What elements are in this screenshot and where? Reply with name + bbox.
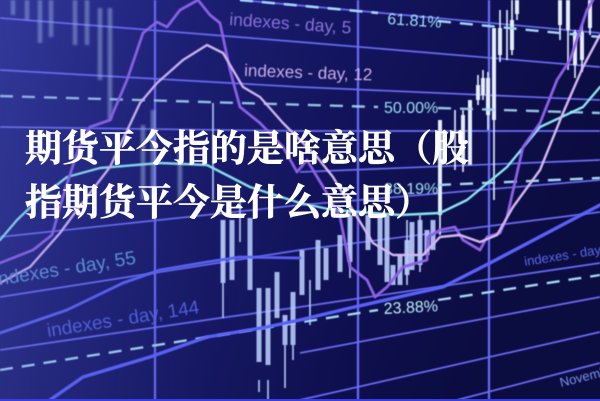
label: day 144: indexes - day, 144: [45, 297, 201, 342]
label: 50.00%: 50.00%: [384, 100, 438, 117]
curve: day 144: [50, 205, 600, 400]
left candlesticks, faded: [13, 0, 180, 200]
curve: day 12: [0, 35, 600, 283]
curve: day 5: [0, 0, 593, 297]
curve: day 55: [0, 257, 300, 333]
label: 23.88%: 23.88%: [383, 298, 438, 318]
title: [25, 128, 469, 224]
center candlesticks: [213, 103, 433, 400]
right candlesticks, bright: [440, 0, 590, 235]
title: 期货平今指的是啥意思（股: [25, 129, 469, 170]
label: day 12: indexes - day, 12: [244, 61, 373, 84]
label: 38.19%: 38.19%: [384, 181, 438, 198]
label: 61.81%: 61.81%: [387, 11, 442, 32]
label: day 5: indexes - day, 5: [229, 9, 352, 38]
title: 指期货平今是什么意思）: [25, 183, 432, 224]
curve: teal: [0, 87, 600, 240]
